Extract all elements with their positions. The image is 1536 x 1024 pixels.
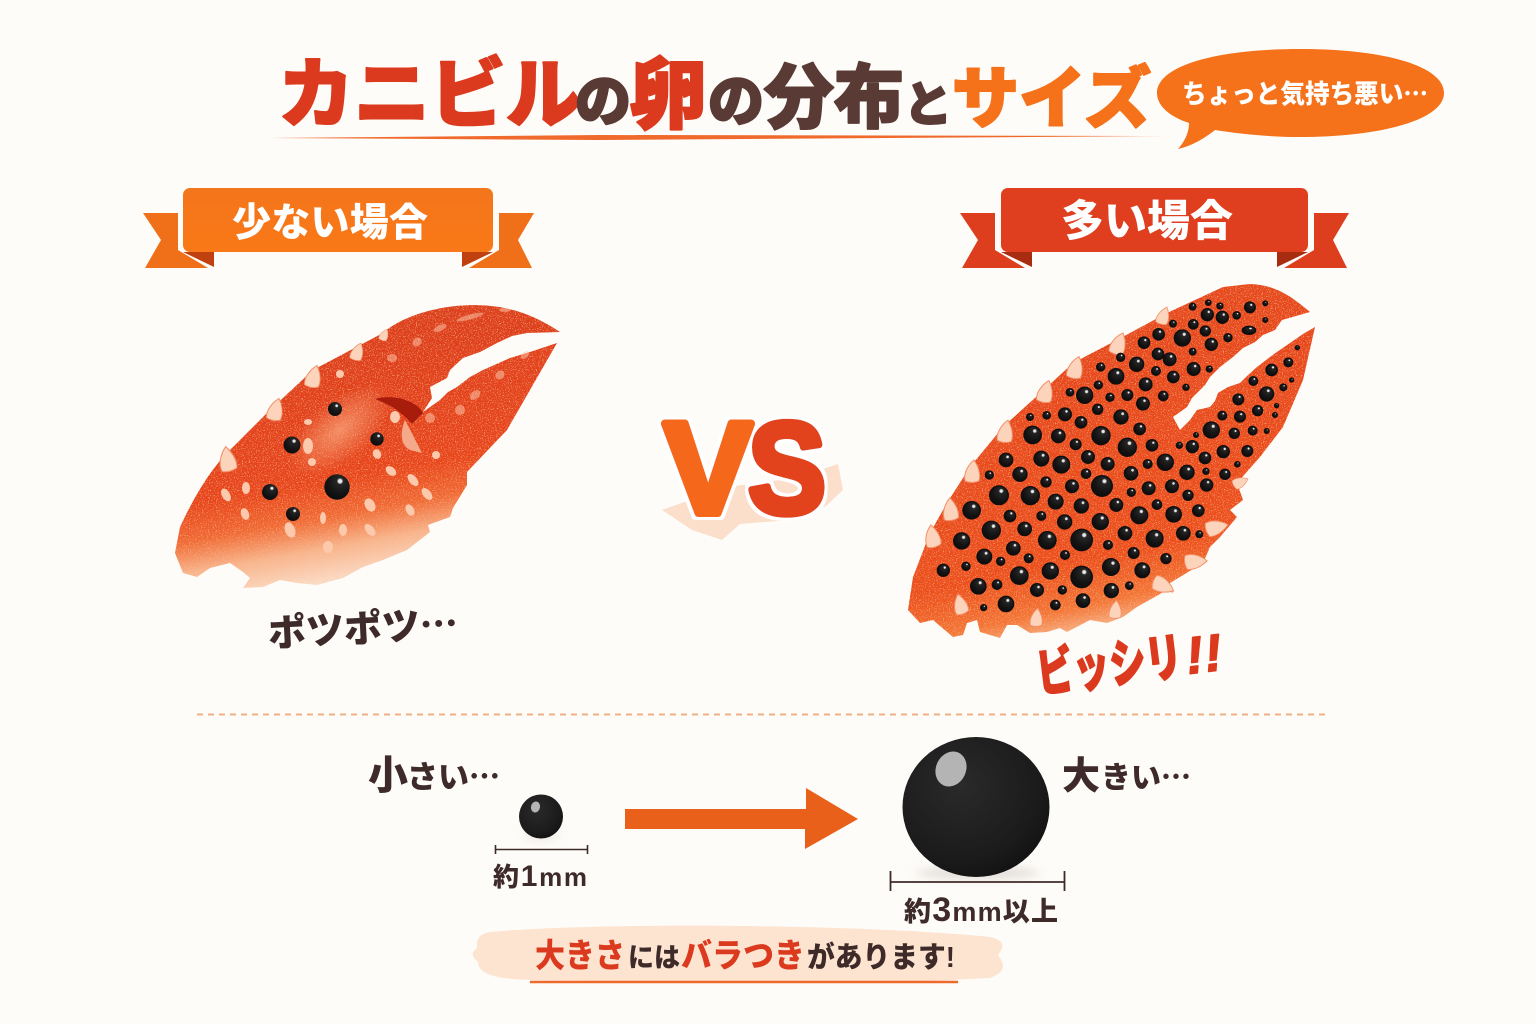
arrow (625, 788, 858, 849)
label: large: 大 (1062, 756, 1100, 798)
measure: 3mm: 約3mm以上 (904, 891, 1058, 929)
note banner: があります! (807, 940, 955, 974)
ribbon: many: 多い場合 (1061, 198, 1233, 246)
small egg (519, 794, 563, 839)
title: 卵 (629, 51, 707, 139)
large egg (902, 737, 1050, 878)
note banner: には (628, 943, 680, 973)
title: カニビル (278, 53, 582, 138)
title (270, 51, 1168, 140)
divider (197, 714, 1328, 716)
ribbon: few: 少ない場合 (232, 202, 428, 245)
measure: 1mm: 約1mm (493, 860, 587, 893)
eggs: many (937, 300, 1299, 612)
label: large: きい… (1101, 753, 1191, 797)
caption: sparse: ポツポツ… (266, 593, 459, 658)
title underline (270, 135, 1168, 140)
pale spots (219, 308, 531, 553)
measure: 3mm (890, 871, 1064, 929)
label: small: さい… (407, 752, 500, 797)
crab claw: many eggs (908, 284, 1315, 638)
spines (216, 327, 390, 473)
VS mark (662, 395, 843, 541)
speech bubble (1157, 49, 1444, 149)
palm shading (273, 367, 423, 493)
label: small (368, 752, 500, 798)
eggs: few (262, 402, 384, 521)
measure: 1mm (493, 845, 588, 893)
ribbon: many (960, 188, 1349, 268)
title: サイズ (952, 62, 1151, 137)
title: と (904, 79, 952, 132)
caption: dense: ビッシリ (1034, 628, 1186, 704)
spines (922, 305, 1250, 626)
note banner (473, 926, 1003, 982)
title: の (575, 70, 631, 133)
ribbon: few (143, 188, 534, 268)
caption: dense: !! (1183, 624, 1225, 686)
title: の (708, 70, 764, 133)
VS mark: S (748, 395, 826, 541)
crab claw: few eggs (175, 305, 560, 588)
label: small: 小 (368, 754, 408, 798)
speech bubble: ちょっと気持ち悪い… (1182, 74, 1428, 111)
label: large (1062, 753, 1191, 798)
title: 分布 (764, 59, 904, 137)
note banner: 大きさ (535, 937, 625, 974)
note banner: バラつき (681, 937, 805, 974)
VS mark: V (664, 395, 752, 541)
